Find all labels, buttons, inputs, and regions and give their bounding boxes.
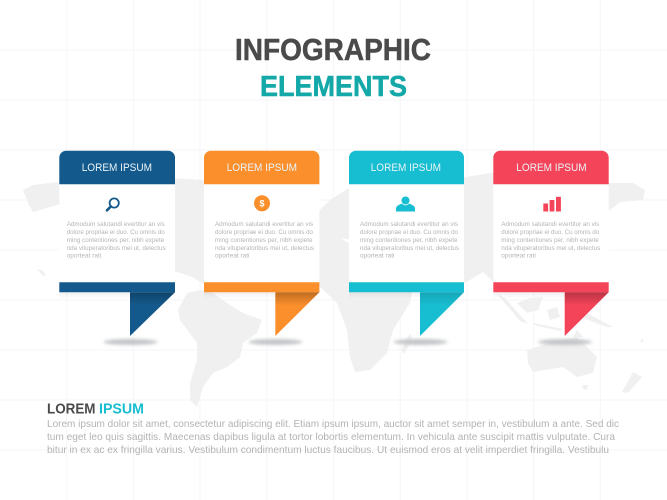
card 3 pointer (349, 282, 464, 345)
footer paragraph: tum eget leo quis sagittis. Maecenas dapibus ligula at tortor lobortis elementum. In vehicula ante suscipit mattis vulputate. Cura (47, 431, 615, 443)
card 4 text: dolore propriae ei duo. Cu omnis do (501, 229, 600, 236)
card 1 text: Admodum salutandi evertitur an vis (67, 221, 165, 228)
card 3 text: oporteat rati (360, 252, 394, 260)
card 3 header: LOREM IPSUM (371, 162, 441, 174)
icon: dollar coin: $ (259, 199, 265, 209)
card 1 pointer (59, 282, 175, 345)
card 4 text: ming contentiones per, nibh expete (501, 237, 599, 244)
panel: card 1 blue (59, 151, 175, 345)
icon: bar chart (543, 197, 561, 212)
card 1 text: oporteat rati (67, 252, 101, 260)
footer heading (47, 402, 144, 418)
world map (23, 172, 645, 407)
card 1 text: ming contentiones per, nibh expete (67, 237, 165, 244)
card 1 text: nda vituperatoribus mei ut, delectus (67, 245, 166, 252)
footer heading: LOREM (47, 402, 96, 418)
card 4 header: LOREM IPSUM (516, 162, 587, 174)
icon: dollar coin (254, 195, 270, 211)
card 2 text: nda vituperatoribus mei ut, delectus (215, 245, 314, 252)
card 2 text: dolore propriae ei duo. Cu omnis do (215, 229, 313, 236)
icon: magnifier (107, 198, 119, 210)
card 4 pointer (493, 282, 609, 345)
card 2 header (204, 151, 319, 184)
card 3 text (360, 221, 459, 260)
card 1 text: dolore propriae ei duo. Cu omnis do (67, 229, 165, 236)
footer heading: IPSUM (99, 402, 144, 418)
card 2 pointer (204, 282, 319, 345)
card 4 header (493, 151, 609, 184)
card 1 header: LOREM IPSUM (82, 162, 152, 174)
card 4 text: Admodum salutandi evertitur an vis (501, 221, 599, 228)
footer paragraph (47, 418, 619, 456)
card 4 text (501, 221, 600, 260)
card 3 text: Admodum salutandi evertitur an vis (360, 221, 458, 228)
title: INFOGRAPHIC (235, 33, 431, 67)
footer paragraph: bitur in ex ac ex fringilla varius. Vestibulum condimentum luctus faucibus. Ut euismod eros at velit imperdiet fringilla. Vestibulu (47, 444, 609, 456)
panel: card 2 orange (204, 151, 319, 345)
title: ELEMENTS (260, 71, 407, 103)
card 1 header (59, 151, 175, 184)
card 2 text: Admodum salutandi evertitur an vis (215, 221, 313, 228)
card 2 text (215, 221, 314, 260)
card 2 header: LOREM IPSUM (227, 162, 297, 174)
card 3 text: nda vituperatoribus mei ut, delectus (360, 245, 459, 252)
icon: person (396, 196, 415, 212)
card 2 text: oporteat rati (215, 252, 250, 260)
card 1 text (67, 221, 166, 260)
card 3 text: ming contentiones per, nibh expete (360, 237, 458, 244)
card 4 text: oporteat rati (501, 252, 536, 260)
card 3 text: dolore propriae ei duo. Cu omnis do (360, 229, 458, 236)
footer paragraph: Lorem ipsum dolor sit amet, consectetur adipiscing elit. Etiam ipsum ipsum, auctor sit amet semper in, vestibulum a ante. Sed dic (47, 418, 619, 430)
title (235, 33, 431, 103)
card 2 text: ming contentiones per, nibh expete (215, 237, 313, 244)
card 3 header (349, 151, 464, 184)
panel: card 3 cyan (349, 151, 464, 345)
panel: card 4 red (493, 151, 609, 345)
card 4 text: nda vituperatoribus mei ut, delectus (501, 245, 600, 252)
